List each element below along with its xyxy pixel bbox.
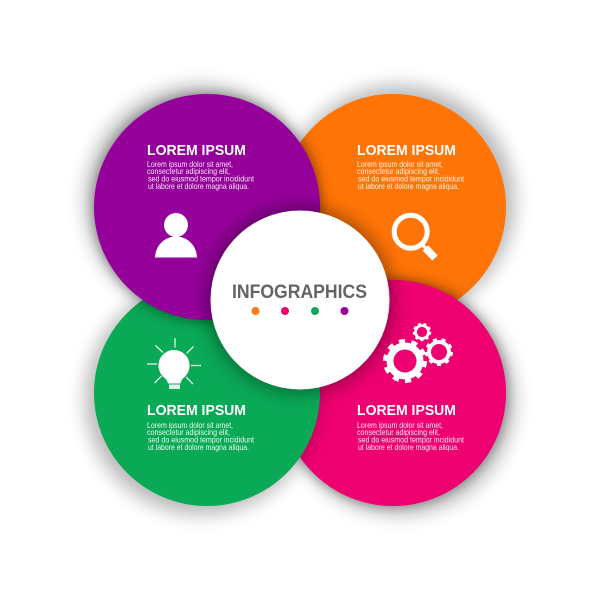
- purple body text: ut labore et dolore magna aliqua.: [148, 181, 249, 191]
- purple body text: [147, 159, 255, 191]
- purple body text: consectetur adipiscing elit,: [147, 166, 230, 176]
- pink body text: ut labore et dolore magna aliqua.: [358, 442, 459, 452]
- pink body text: [357, 420, 465, 452]
- green heading: LOREM IPSUM: [147, 402, 246, 419]
- pink body text: sed do eiusmod tempor incididunt: [358, 434, 465, 444]
- icon: gears: [386, 324, 452, 380]
- green body text: consectetur adipiscing elit,: [147, 427, 230, 437]
- purple body text: Lorem ipsum dolor sit amet,: [147, 159, 233, 169]
- pink body text: consectetur adipiscing elit,: [357, 427, 440, 437]
- title: INFOGRAPHICS: [232, 281, 367, 303]
- orange body text: Lorem ipsum dolor sit amet,: [357, 159, 443, 169]
- pink body text: Lorem ipsum dolor sit amet,: [357, 420, 443, 430]
- panel: purple circle: [85, 85, 321, 321]
- panel: green circle: [85, 280, 320, 515]
- icon: magnifier: [394, 215, 435, 258]
- panel: center circle: [207, 207, 393, 393]
- panel: pink circle: [279, 279, 515, 515]
- panel: orange circle: [280, 85, 515, 320]
- color dots: [252, 307, 348, 315]
- orange body text: [357, 159, 465, 191]
- orange body text: consectetur adipiscing elit,: [357, 166, 440, 176]
- icon: person: [155, 213, 197, 258]
- purple heading: LOREM IPSUM: [147, 142, 246, 159]
- orange body text: ut labore et dolore magna aliqua.: [358, 181, 459, 191]
- purple body text: sed do eiusmod tempor incididunt: [148, 174, 255, 184]
- green body text: Lorem ipsum dolor sit amet,: [147, 420, 233, 430]
- green body text: ut labore et dolore magna aliqua.: [148, 442, 249, 452]
- green body text: sed do eiusmod tempor incididunt: [148, 434, 255, 444]
- icon: light bulb: [147, 338, 201, 389]
- orange heading: LOREM IPSUM: [357, 142, 456, 159]
- pink heading: LOREM IPSUM: [357, 402, 456, 419]
- orange body text: sed do eiusmod tempor incididunt: [358, 174, 465, 184]
- green body text: [147, 420, 255, 452]
